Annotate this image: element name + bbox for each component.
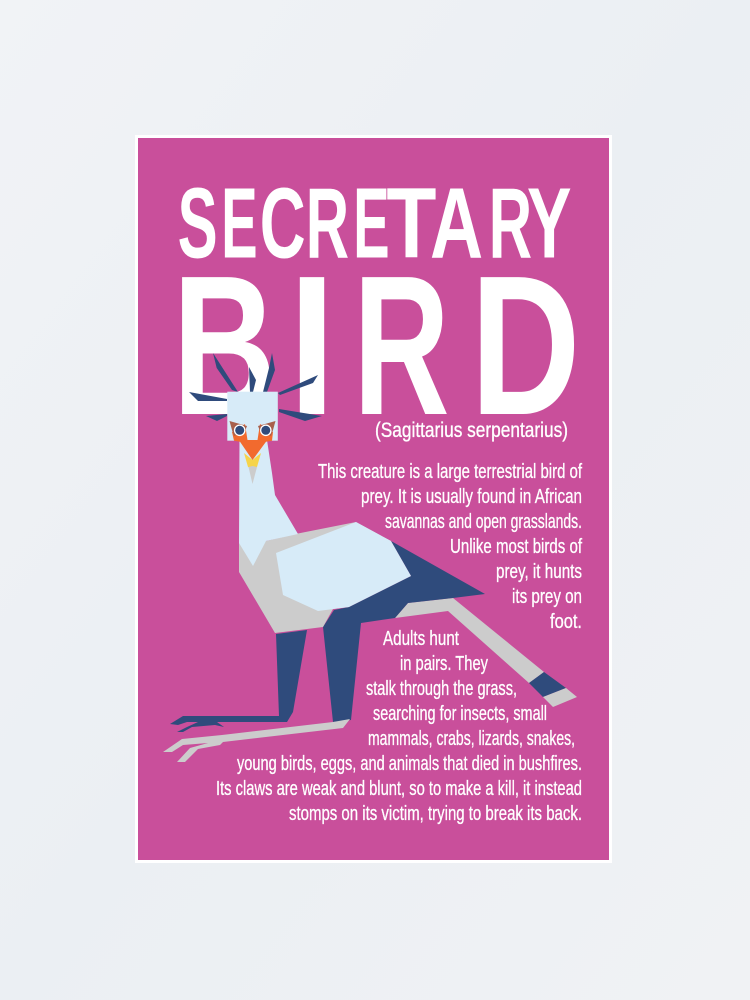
title: secretary: A	[430, 168, 483, 279]
title: secretary: S	[178, 168, 218, 279]
description text: Unlike most birds of	[450, 536, 582, 558]
title: secretary: C	[260, 167, 306, 279]
title: secretary: E	[221, 168, 258, 280]
grey foot	[163, 719, 350, 762]
beak tip grey	[248, 466, 257, 484]
wing	[276, 522, 411, 611]
description text	[216, 461, 582, 825]
description text: Adults hunt	[383, 628, 459, 650]
description text: its prey on	[512, 586, 582, 608]
title: secretary	[178, 167, 571, 280]
description text: foot.	[550, 611, 582, 633]
brows	[230, 421, 276, 436]
title: secretary: E	[353, 168, 390, 280]
description text: searching for insects, small	[373, 703, 547, 725]
title: bird: D	[470, 234, 580, 457]
description text: savannas and open grasslands.	[385, 511, 582, 533]
near leg	[170, 630, 307, 732]
leg band	[529, 672, 566, 697]
crest feathers	[189, 353, 322, 421]
description text: stomps on its victim, trying to break its back.	[289, 803, 582, 825]
secretary bird illustration	[163, 353, 577, 762]
title: bird: B	[172, 234, 276, 456]
face orange	[232, 424, 273, 460]
grey body	[239, 522, 391, 633]
title: bird	[172, 234, 580, 457]
title: secretary: R	[489, 168, 532, 279]
navy tail and thigh	[323, 541, 485, 722]
description text: prey. It is usually found in African	[361, 486, 582, 508]
scientific name: (Sagittarius serpentarius)	[375, 419, 568, 442]
head	[227, 392, 278, 441]
description text: This creature is a large terrestrial bird of	[318, 461, 582, 483]
description text: young birds, eggs, and animals that died in bushfires.	[237, 753, 582, 775]
description text: Its claws are weak and blunt, so to make a kill, it instead	[216, 778, 582, 800]
description text: in pairs. They	[400, 653, 488, 675]
description text: stalk through the grass,	[366, 678, 517, 700]
grey rear leg and tail	[395, 598, 544, 683]
neck	[239, 440, 298, 566]
title: secretary: R	[306, 168, 349, 279]
title: secretary: T	[386, 168, 436, 279]
poster panel	[135, 135, 612, 863]
title: bird: I	[288, 235, 335, 457]
eyes	[234, 424, 272, 436]
description text: prey, it hunts	[496, 561, 582, 583]
title: bird: R	[353, 234, 450, 456]
grey leg tip	[543, 688, 577, 707]
description text: mammals, crabs, lizards, snakes,	[368, 728, 575, 750]
beak lower yellow	[244, 453, 261, 469]
title: secretary: Y	[527, 168, 571, 280]
